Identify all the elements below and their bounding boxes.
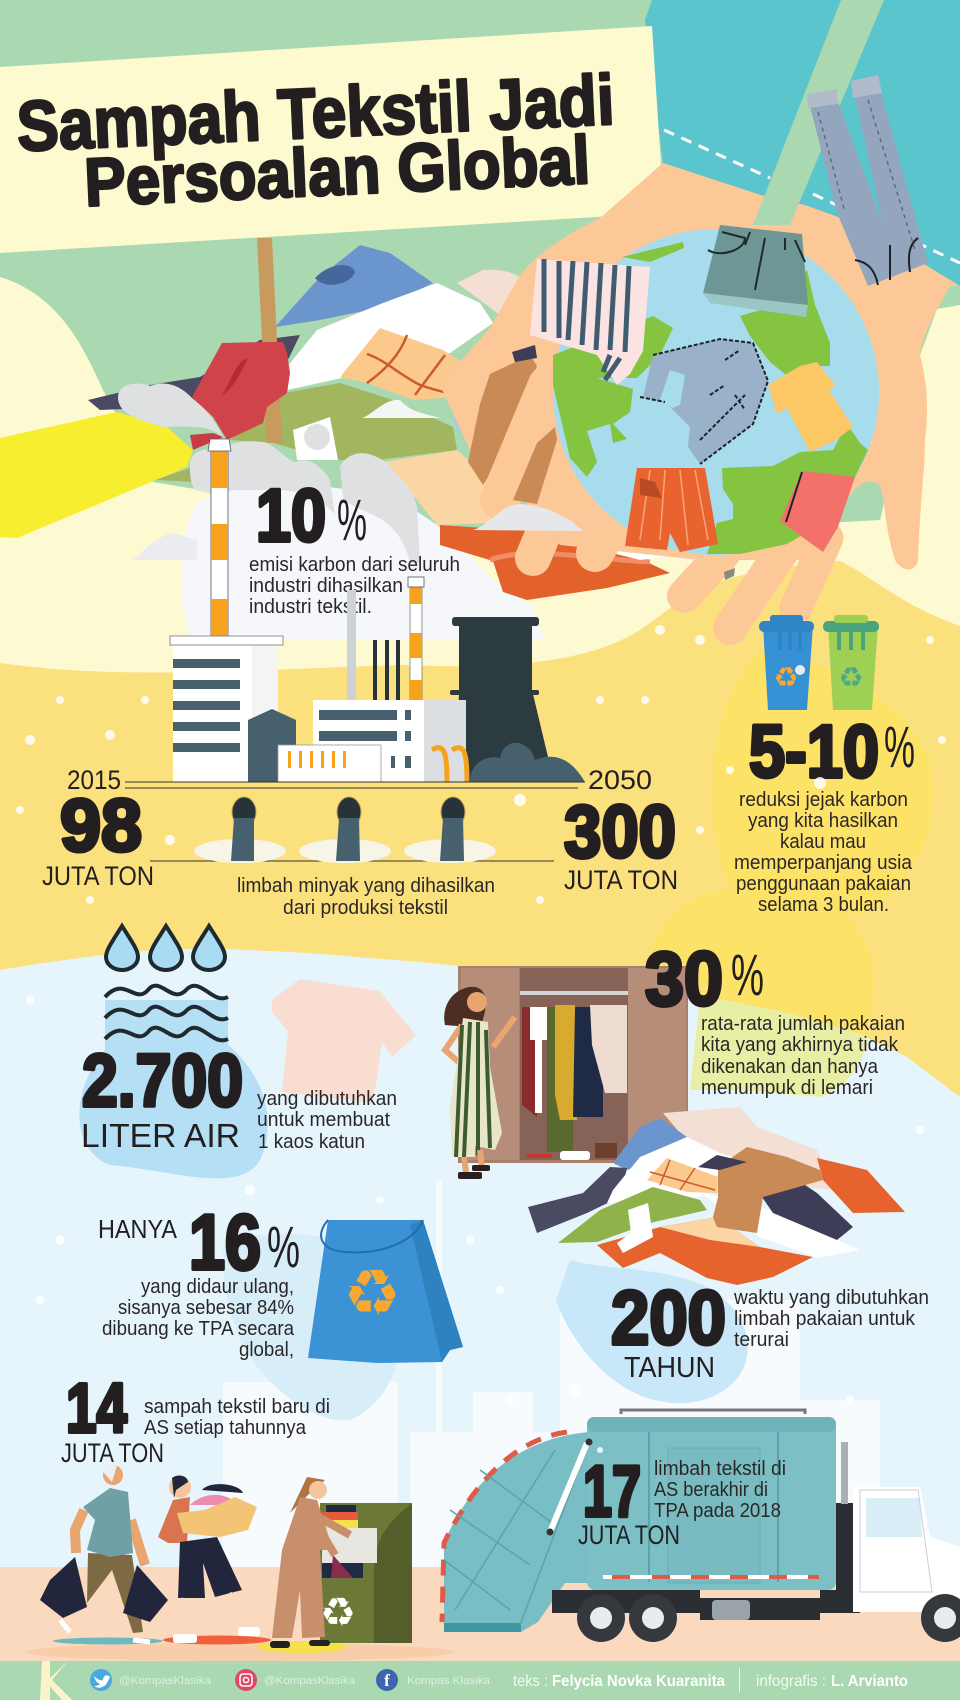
credits: infografis :	[756, 1673, 826, 1690]
stat: 10 percent: industri dihasilkan	[249, 575, 403, 597]
denim jacket	[640, 339, 768, 464]
stat: oil waste 2015 to 2050: limbah minyak yang dihasilkan	[237, 875, 495, 897]
logo K	[40, 1661, 72, 1700]
credits: L. Arvianto	[831, 1673, 908, 1690]
ground lines	[125, 782, 585, 861]
stat: 30 percent: rata-rata jumlah pakaian	[701, 1013, 905, 1035]
stat: 200 tahun: terurai	[734, 1329, 789, 1351]
stat: 14 juta ton: 14	[66, 1369, 127, 1447]
stat: 16 percent recycled: yang didaur ulang,	[141, 1276, 294, 1298]
stat: 16 percent recycled: global,	[239, 1339, 294, 1361]
stat: 2.700 liter air: untuk membuat	[257, 1109, 390, 1131]
title: Sampah Tekstil Jadi	[15, 61, 616, 167]
background: ground	[0, 1567, 960, 1662]
stat: 16 percent recycled: sisanya sebesar 84%	[118, 1297, 294, 1319]
stat: oil waste 2015 to 2050	[42, 765, 678, 919]
jeans	[807, 75, 928, 286]
stat: oil waste 2015 to 2050: 98	[60, 784, 142, 867]
illustration: people disposing clothes: ♻	[320, 1590, 356, 1636]
stat: oil waste 2015 to 2050: JUTA TON	[42, 861, 154, 891]
icon: water waves	[105, 986, 228, 1040]
illustration: wardrobe with clothes	[458, 966, 688, 1163]
stat: 200 tahun	[611, 1276, 929, 1384]
social: instagram	[235, 1669, 356, 1691]
red hand gripping the pole	[190, 342, 290, 450]
blob behind 2.700	[79, 1000, 268, 1178]
illustration: factory	[170, 577, 585, 782]
illustration: garbage truck	[442, 1410, 960, 1642]
stat: 17 juta ton: 17	[583, 1452, 641, 1532]
teal backdrop with dashed seam	[645, 0, 960, 286]
icon: recycling bins: ♻	[773, 661, 799, 694]
stat: 16 percent recycled: HANYA	[98, 1214, 178, 1244]
illustration: people disposing clothes	[40, 1465, 412, 1653]
stat: 10 percent: industri tekstil.	[249, 596, 372, 618]
yellow tee	[768, 362, 853, 452]
illustration: clothes pile	[528, 1107, 905, 1285]
illustration: hands cradling globe	[440, 0, 960, 628]
pole	[257, 238, 282, 443]
social: facebook: Kompas Klasika	[407, 1675, 491, 1687]
icon: cotton t-shirt	[272, 979, 416, 1103]
stat: 30 percent: dikenakan dan hanya	[701, 1056, 879, 1078]
icon: recycling bins: ♻	[838, 661, 864, 694]
social: twitter	[90, 1669, 212, 1691]
stat: 10 percent	[249, 474, 460, 618]
stat: 30 percent: %	[731, 943, 764, 1008]
stat: 17 juta ton	[578, 1452, 786, 1550]
denim shorts	[703, 225, 808, 317]
stat: oil waste 2015 to 2050: 2050	[588, 765, 652, 795]
stat: 16 percent recycled	[98, 1198, 300, 1361]
stat: 14 juta ton	[61, 1369, 330, 1468]
blob behind 200 tahun	[556, 1260, 748, 1403]
icon: recycling bins	[759, 615, 879, 710]
stat: 30 percent: 30	[645, 937, 723, 1022]
coral skirt	[780, 471, 855, 552]
stat: 16 percent recycled: 16	[189, 1198, 261, 1286]
striped shirt	[530, 259, 650, 385]
icon: blue recycling bag: ♻	[343, 1257, 401, 1331]
title: Persoalan Global	[83, 122, 592, 221]
title sign	[0, 26, 664, 253]
illustration: woman at wardrobe	[444, 987, 515, 1179]
strap	[753, 0, 884, 225]
stat: 5-10 percent: kalau mau	[780, 831, 866, 853]
orange shorts	[625, 468, 718, 552]
stat: 10 percent: %	[337, 488, 367, 553]
blob behind 16 percent	[223, 1234, 403, 1420]
stat: 17 juta ton: limbah tekstil di	[654, 1458, 786, 1480]
stat: 16 percent recycled: %	[267, 1215, 300, 1280]
stat: 5-10 percent: yang kita hasilkan	[748, 810, 898, 832]
title	[15, 61, 619, 224]
stat: oil waste 2015 to 2050: dari produksi tekstil	[283, 897, 448, 919]
illustration: pile of clothes under sign	[88, 245, 680, 600]
stat: 5-10 percent: penggunaan pakaian	[736, 873, 911, 895]
credits	[513, 1668, 908, 1692]
stat: 30 percent	[645, 937, 905, 1099]
background: city skyline	[223, 1180, 880, 1572]
stat: 200 tahun: waktu yang dibutuhkan	[733, 1287, 929, 1309]
stat: 10 percent: 10	[256, 474, 326, 557]
stat: 5-10 percent: selama 3 bulan.	[758, 894, 889, 916]
stat: 5-10 percent: reduksi jejak karbon	[739, 789, 908, 811]
stat: 5-10 percent: %	[884, 715, 915, 780]
social: twitter: @KompasKlasika	[119, 1675, 212, 1687]
icon: blue recycling bag	[308, 1220, 463, 1363]
stat: 16 percent recycled: dibuang ke TPA secara	[102, 1318, 295, 1340]
social: facebook	[376, 1669, 491, 1691]
stat: 200 tahun: limbah pakaian untuk	[734, 1308, 916, 1330]
stat: 14 juta ton: JUTA TON	[61, 1438, 164, 1468]
stat: 17 juta ton: TPA pada 2018	[654, 1500, 781, 1522]
icon: water drops	[106, 926, 225, 970]
stat: 30 percent: menumpuk di lemari	[701, 1077, 873, 1099]
social: facebook: f	[384, 1671, 390, 1690]
background: pale smoke cloud	[181, 485, 545, 640]
stat: oil waste 2015 to 2050: 2015	[67, 765, 121, 795]
stat: 2.700 liter air: LITER AIR	[81, 1117, 240, 1154]
stat: oil waste 2015 to 2050: JUTA TON	[564, 865, 678, 895]
footer band	[0, 1661, 960, 1700]
smokestack: tall striped	[208, 439, 231, 636]
stat: 14 juta ton: sampah tekstil baru di	[144, 1396, 330, 1418]
stat: 17 juta ton: JUTA TON	[578, 1520, 680, 1550]
credits: teks :	[513, 1673, 548, 1690]
stat: 2.700 liter air: 1 kaos katun	[258, 1131, 365, 1153]
social: instagram: @KompasKlasika	[264, 1675, 356, 1687]
yellow sleeved arm	[0, 412, 193, 538]
stat: 2.700 liter air	[81, 1039, 397, 1154]
stat: 200 tahun: TAHUN	[624, 1352, 715, 1384]
stat: 5-10 percent: 5-10	[749, 710, 879, 793]
stat: 5-10 percent	[734, 710, 915, 916]
stat: oil waste 2015 to 2050: 300	[564, 790, 676, 873]
stat: 2.700 liter air: yang dibutuhkan	[257, 1088, 397, 1110]
smoke clouds	[118, 383, 440, 563]
stat: 2.700 liter air: 2.700	[82, 1039, 243, 1122]
stat: 14 juta ton: AS setiap tahunnya	[144, 1417, 307, 1439]
white sock cloth	[293, 417, 338, 460]
stat: 200 tahun: 200	[611, 1276, 726, 1361]
stat: 17 juta ton: AS berakhir di	[654, 1479, 768, 1501]
stat: 30 percent: kita yang akhirnya tidak	[701, 1034, 899, 1056]
credits: Felycia Novka Kuaranita	[552, 1673, 725, 1690]
stat: 10 percent: emisi karbon dari seluruh	[249, 554, 460, 576]
stat: 5-10 percent: memperpanjang usia	[734, 852, 913, 874]
illustration: discharge pipes	[194, 797, 496, 863]
